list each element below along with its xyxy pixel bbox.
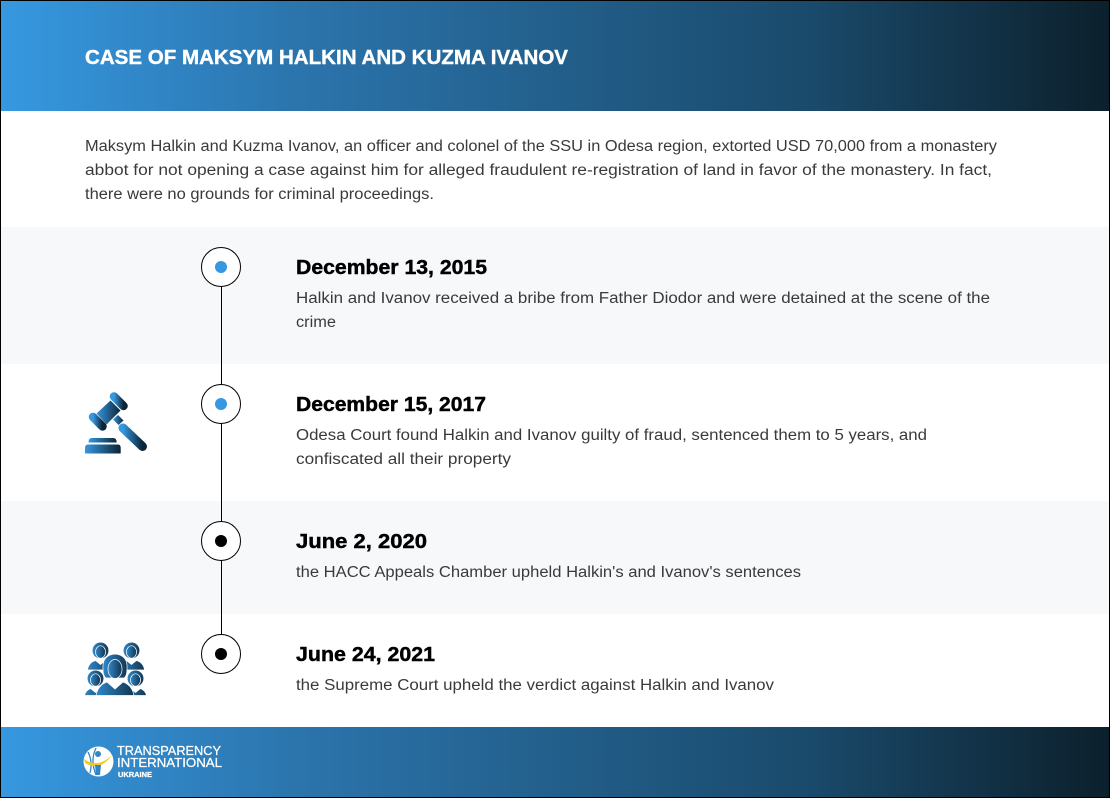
- logo emblem: [84, 746, 114, 776]
- icon: gavel: [85, 396, 142, 454]
- event: June 24, 2021: [296, 643, 774, 694]
- icon: group of people: [84, 642, 146, 696]
- event: December 15, 2017: confiscated all their property: [296, 451, 511, 468]
- logo wordmark: UKRAINE: [118, 772, 152, 779]
- intro text: abbot for not opening a case against him for alleged fraudulent re-registration of land in favor of the monastery. In fact,: [85, 162, 992, 179]
- event: June 2, 2020: [296, 530, 801, 581]
- timeline marker: June 24, 2021: [202, 634, 240, 674]
- event: December 15, 2017: December 15, 2017: [296, 393, 486, 416]
- event: December 15, 2017: Odesa Court found Halkin and Ivanov guilty of fraud, sentenced them to 5 years, and: [296, 427, 927, 444]
- logo wordmark: TRANSPARENCY: [117, 744, 222, 758]
- timeline marker: June 2, 2020: [202, 522, 240, 560]
- logo wordmark: INTERNATIONAL: [117, 756, 222, 770]
- event: December 13, 2015: crime: [296, 314, 336, 331]
- header banner: [1, 1, 1109, 111]
- timeline axis: [221, 267, 222, 654]
- intro text: there were no grounds for criminal proceedings.: [85, 186, 434, 203]
- intro text: Maksym Halkin and Kuzma Ivanov, an officer and colonel of the SSU in Odesa region, extorted USD 70,000 from a monastery: [85, 138, 997, 155]
- person back right: [118, 642, 144, 670]
- event: December 15, 2017: [296, 393, 927, 468]
- event: June 24, 2021: the Supreme Court upheld the verdict against Halkin and Ivanov: [296, 677, 774, 694]
- footer banner: [1, 727, 1109, 797]
- event: December 13, 2015: Halkin and Ivanov received a bribe from Father Diodor and were detained at the scene of the: [296, 290, 990, 307]
- intro text: [85, 138, 997, 203]
- band: row 3 background: [1, 501, 1109, 614]
- person centre: [96, 654, 134, 696]
- person front right: [122, 670, 146, 696]
- timeline marker: December 15, 2017: [202, 384, 240, 424]
- event: June 2, 2020: the HACC Appeals Chamber upheld Halkin's and Ivanov's sentences: [296, 564, 801, 581]
- logo: Transparency International Ukraine: [84, 744, 222, 779]
- band: row 1 background: [1, 227, 1109, 364]
- logo wordmark: [117, 744, 222, 779]
- event: June 2, 2020: June 2, 2020: [296, 530, 427, 553]
- person back left: [88, 642, 114, 670]
- title: CASE OF MAKSYM HALKIN AND KUZMA IVANOV: [85, 47, 569, 69]
- event: December 13, 2015: [296, 256, 990, 331]
- event: December 13, 2015: December 13, 2015: [296, 256, 487, 279]
- person front left: [84, 670, 110, 696]
- event: June 24, 2021: June 24, 2021: [296, 643, 435, 666]
- timeline marker: December 13, 2015: [202, 248, 240, 286]
